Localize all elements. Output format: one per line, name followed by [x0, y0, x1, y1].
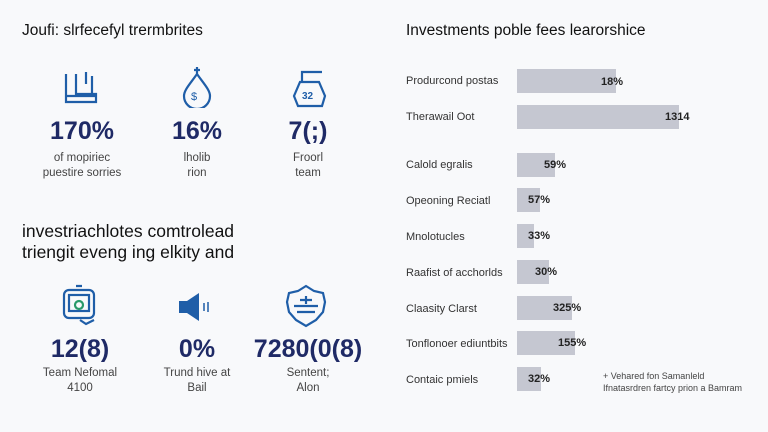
bar chart	[406, 75, 508, 386]
icon: badge	[286, 284, 326, 328]
row 6: Raafist of acchorlds	[406, 267, 503, 279]
footnote	[603, 371, 742, 393]
number: 170%	[50, 117, 114, 145]
icon: money drop	[182, 67, 212, 108]
row 4: Opeoning Reciatl	[406, 195, 490, 207]
caption: rion	[187, 167, 207, 179]
row 7: Claasity Clarst	[406, 303, 477, 315]
stat 1	[43, 72, 121, 179]
caption: puestire sorries	[43, 167, 121, 179]
number: 16%	[172, 117, 222, 145]
row 5: Mnolotucles	[406, 231, 465, 243]
stat 3	[289, 70, 327, 179]
footnote: + Vehared fon Samanleld	[603, 371, 704, 381]
caption: lholib	[184, 152, 210, 164]
text: 325%	[553, 302, 581, 314]
stat 6	[254, 284, 362, 394]
text: 155%	[558, 337, 586, 349]
heading 2	[22, 221, 234, 262]
row 2: Therawail Oot	[406, 111, 474, 123]
caption: Team Nefomal	[43, 367, 117, 379]
text: 32%	[528, 373, 550, 385]
stat 4	[43, 284, 117, 394]
text: 59%	[544, 159, 566, 171]
footnote: Ifnatasrdren fartcy prion a Bamram	[603, 383, 742, 393]
text: 57%	[528, 194, 550, 206]
caption	[293, 152, 323, 179]
caption: team	[295, 167, 321, 179]
icon: certificate	[62, 284, 96, 326]
icon: bag	[292, 70, 326, 108]
row 9: Contaic pmiels	[406, 374, 478, 386]
title: right: Investments poble fees learorshice	[406, 22, 646, 39]
number: 12(8)	[51, 335, 109, 363]
icon: bag: 32	[302, 91, 314, 102]
row 8: Tonflonoer ediuntbits	[406, 338, 508, 350]
number: 0%	[179, 335, 215, 363]
caption: Trund hive at	[164, 367, 230, 379]
icon: speaker	[179, 293, 209, 321]
number: 7280(0(8)	[254, 335, 362, 363]
caption	[43, 152, 121, 179]
bar values: 18%	[601, 76, 623, 88]
row 3: Calold egralis	[406, 159, 473, 171]
title: left top: Joufi: slrfecefyl trermbrites	[22, 22, 203, 39]
caption: 4100	[67, 382, 93, 394]
caption	[184, 152, 210, 179]
caption	[287, 367, 329, 394]
caption: Bail	[187, 382, 207, 394]
heading 2: triengit eveng ing elkity and	[22, 242, 234, 262]
stat 5	[164, 293, 230, 394]
caption	[164, 367, 230, 394]
number: 7(;)	[289, 117, 327, 145]
icon: building	[64, 72, 98, 104]
caption: Sentent;	[287, 367, 329, 379]
icon: money drop: $	[191, 91, 197, 103]
text: 1314	[665, 111, 689, 123]
stat 2	[172, 67, 222, 179]
caption: Froorl	[293, 152, 323, 164]
caption	[43, 367, 117, 394]
heading 2: investriachlotes comtrolead	[22, 221, 234, 241]
row 1: Produrcond postas	[406, 75, 498, 87]
caption: Alon	[296, 382, 320, 394]
bars	[517, 69, 616, 93]
text: 30%	[535, 266, 557, 278]
text: 33%	[528, 230, 550, 242]
caption: of mopiriec	[54, 152, 110, 164]
